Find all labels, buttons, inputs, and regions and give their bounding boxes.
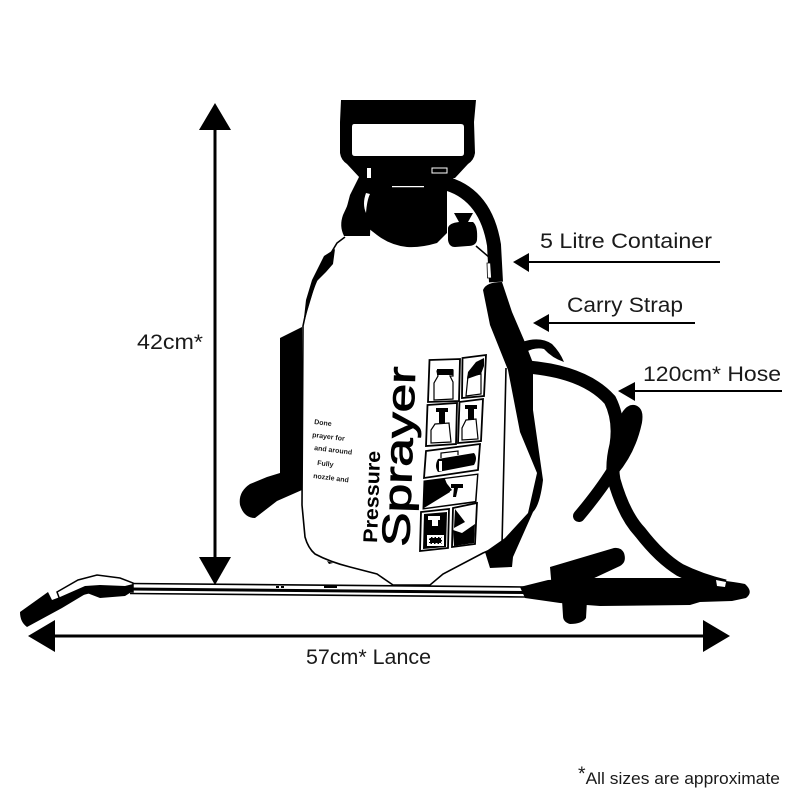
panel: pour (462, 355, 486, 398)
arrow: container (513, 253, 720, 272)
small instruction text: prayer for (312, 432, 345, 443)
label: container: 5 Litre Container (540, 230, 712, 253)
panel: spray (423, 474, 478, 509)
small instruction text: and around (314, 445, 352, 457)
strap loose end (522, 339, 564, 362)
footnote: * (578, 764, 586, 785)
hose clip (487, 263, 492, 278)
left back strap (240, 327, 302, 518)
small instruction text: nozzle and (313, 473, 349, 484)
panel: clean (420, 509, 449, 551)
pump handle (340, 100, 476, 178)
shoulder strap detail (303, 249, 335, 327)
hose loop (579, 411, 636, 516)
arrow: lance width (28, 620, 730, 652)
pump left arm (341, 178, 372, 236)
small instruction text: Fully (317, 460, 334, 469)
nozzle (57, 575, 133, 600)
panel: pump (458, 399, 483, 443)
pump highlights (364, 168, 424, 213)
label: lance: 57cm* Lance (306, 646, 431, 669)
right strap (483, 282, 543, 568)
panel: store (452, 503, 477, 547)
panel: fill (428, 359, 460, 402)
product text: Sprayer (375, 366, 424, 547)
trigger (550, 548, 625, 590)
hose (528, 367, 725, 586)
footnote: All sizes are approximate (586, 769, 780, 788)
panel: carry (424, 444, 480, 478)
sprayer illustration: Pressure (360, 450, 385, 543)
label: hose: 120cm* Hose (643, 363, 781, 386)
small instruction text: Done (314, 419, 332, 428)
label: height: 42cm* (137, 331, 203, 354)
pump body (345, 175, 455, 247)
label: carry strap: Carry Strap (567, 294, 683, 317)
right shoulder line (476, 246, 490, 258)
lance rod (130, 584, 525, 597)
arrow: height 42cm (199, 103, 231, 585)
lower grip (562, 600, 587, 624)
arrow: carry strap (533, 314, 695, 332)
handle grip (520, 578, 750, 606)
bottle outline (302, 237, 506, 585)
small instruction text (312, 419, 352, 484)
grip label (716, 580, 726, 587)
pictogram panels (420, 355, 486, 551)
hose from pump (448, 184, 496, 282)
rod tick marks (276, 561, 337, 588)
sprayer illustration (20, 100, 750, 627)
panel: screw (426, 403, 457, 446)
arrow: hose (618, 382, 782, 401)
right cap (448, 213, 477, 247)
